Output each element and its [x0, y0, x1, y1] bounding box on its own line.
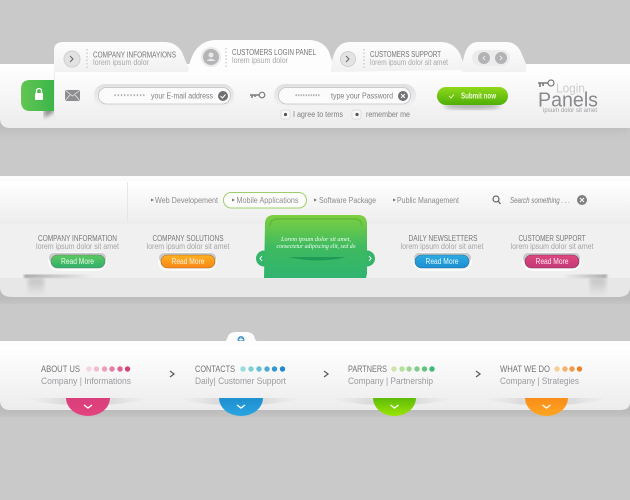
item: about us: Company | Informations [41, 376, 131, 386]
tab: company informations: COMPANY INFORMAYIONS [93, 50, 176, 60]
info: daily newsletters: DAILY NEWSLETTERS [408, 234, 478, 243]
item: what we do: WHAT WE DO [500, 364, 550, 374]
panel: bottom navigation bar [0, 332, 630, 416]
tab: customers support: lorem ipsum dolor sit amet [370, 58, 449, 67]
panel: navigation and info bar [0, 176, 630, 302]
item: contacts: Daily| Customer Support [195, 376, 286, 386]
logo: login panels: Login [556, 80, 585, 96]
checkbox: agree: I agree to terms [293, 110, 343, 119]
callout: green centre card [256, 215, 375, 278]
info: company information: COMPANY INFORMATION [38, 234, 117, 243]
navigation links [151, 192, 460, 208]
item: contacts: CONTACTS [195, 364, 235, 374]
tab: customers login panel: lorem ipsum dolor [232, 56, 288, 65]
shadow: left band [24, 274, 94, 278]
info: customer support: lorem ipsum dolor sit amet [510, 242, 594, 251]
info: customer support [510, 234, 594, 271]
icon: key [250, 92, 265, 98]
tab: customers support [331, 42, 466, 72]
tab: arrows [462, 42, 526, 72]
shadow: right drop [590, 278, 606, 296]
tab: customers login panel: CUSTOMERS LOGIN PANEL [232, 48, 316, 57]
info: customer support: Read More [536, 257, 569, 266]
info: daily newsletters [400, 234, 484, 271]
info: company solutions: COMPANY SOLUTIONS [152, 234, 224, 243]
shadow: left drop [28, 278, 44, 296]
info strip [0, 224, 630, 278]
info: daily newsletters: lorem ipsum dolor sit amet [400, 242, 484, 251]
icon: chevron 1 [170, 371, 174, 377]
icon: chevron 2 [324, 371, 328, 377]
tab: customers login panel [188, 40, 336, 72]
checkbox: remember [352, 110, 410, 119]
field: email [94, 84, 234, 107]
callout: green centre card: Lorem ipsum dolor sit amet, [280, 237, 352, 243]
info: company information: lorem ipsum dolor sit amet [36, 242, 120, 251]
search box: Search something . . . [510, 196, 570, 205]
item: what we do [482, 364, 610, 416]
button: submit now: Submit now [461, 92, 497, 100]
info: company information: Read More [61, 257, 94, 266]
info: company solutions: lorem ipsum dolor sit amet [146, 242, 230, 251]
logo: login panels: Panels [538, 90, 598, 112]
panel: login bar [0, 40, 630, 132]
field: password: ********** [295, 94, 321, 100]
logo: login panels [538, 80, 598, 114]
icon: chevron 3 [476, 371, 480, 377]
info: customer support: CUSTOMER SUPPORT [518, 234, 586, 243]
button: submit now [437, 87, 508, 110]
item: partners [328, 364, 456, 416]
icon: envelope [65, 90, 80, 101]
item: partners: PARTNERS [348, 364, 387, 374]
info: company solutions: Read More [172, 257, 205, 266]
navigation links: Public Management [397, 196, 460, 205]
navigation links: Software Package [319, 196, 376, 205]
info: company information [36, 234, 120, 271]
field: password [274, 84, 416, 107]
tab: company informations [54, 42, 190, 72]
info: company solutions [146, 234, 230, 271]
item: about us: ABOUT US [41, 364, 80, 374]
field: email: your E-mail address [151, 92, 213, 100]
checkbox: remember: remember me [366, 110, 410, 119]
icon: green lock tab [21, 80, 54, 118]
tab: plus button [218, 332, 264, 347]
tab: company informations: lorem ipsum dolor [93, 58, 149, 67]
item: contacts [176, 364, 304, 416]
logo: login panels: ipsum dolor sit amet [543, 107, 597, 114]
shadow: right band [563, 274, 607, 278]
info: daily newsletters: Read More [426, 257, 459, 266]
item: what we do: Company | Strategies [500, 376, 579, 386]
callout: green centre card: consectetur adipiscing elit, sed do [276, 244, 356, 250]
item: about us [24, 364, 152, 416]
field: email: ********** [114, 94, 146, 100]
field: password: type your Password [331, 92, 393, 100]
tab: customers support: CUSTOMERS SUPPORT [370, 50, 441, 59]
navigation links: Web Developement [155, 196, 219, 205]
item: partners: Company | Partnership [348, 376, 433, 386]
navigation links: Mobile Applications [236, 196, 298, 205]
